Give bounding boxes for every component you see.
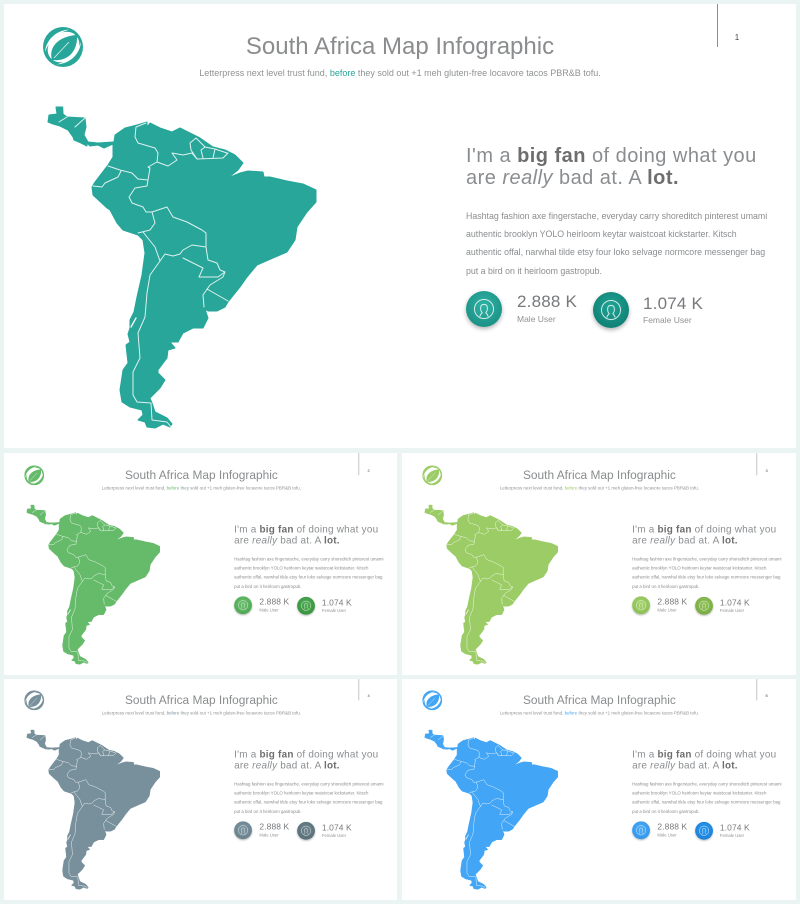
body text: Hashtag fashion axe fingerstache, everyday carry shoreditch pinterest umami [632,557,781,562]
body text: authentic brooklyn YOLO heirloom keytar waistcoat kickstarter. Kitsch [632,566,766,571]
body text: put a bird on it heirloom gastropub. [466,266,602,276]
icon: light green leaf logo [422,465,442,486]
body text: Hashtag fashion axe fingerstache, everyday carry shoreditch pinterest umami [234,557,383,562]
body text: authentic brooklyn YOLO heirloom keytar waistcoat kickstarter. Kitsch [234,791,368,796]
page number divider [357,677,360,700]
stat: female users value: 1.074 K [322,823,351,832]
panel: slate grey slide [4,679,397,900]
subtitle: Letterpress next level trust fund, before they sold out +1 meh gluten-free locavore tacos PBR&B tofu. [102,711,301,716]
body text [466,211,767,276]
heading [632,524,776,546]
icon: male user [234,596,252,614]
title: South Africa Map Infographic [523,468,676,482]
subtitle: Letterpress next level trust fund, before they sold out +1 meh gluten-free locavore tacos PBR&B tofu. [500,486,699,491]
body text: authentic brooklyn YOLO heirloom keytar waistcoat kickstarter. Kitsch [632,791,766,796]
stat: male users value: 2.888 K [259,822,289,831]
heading: I'm a big fan of doing what you [234,524,378,535]
map: South America in blue [424,730,558,890]
stat: female users label: Female User [322,833,346,838]
body text: Hashtag fashion axe fingerstache, everyday carry shoreditch pinterest umami [234,782,383,787]
page number: 2 [367,468,369,473]
panel: blue slide [402,679,796,900]
map: South America in grey [26,730,160,890]
body text [234,557,384,589]
heading: are really bad at. A lot. [632,760,737,771]
icon: female user [695,822,713,840]
map: South America in teal [48,106,316,428]
title: South Africa Map Infographic [246,33,554,60]
body text: authentic offal, narwhal tilde etsy four loko selvage normcore messenger bag [234,800,382,805]
page number: 4 [367,693,369,698]
icon: male user [632,596,650,614]
icon: female user [297,597,315,615]
body text: authentic offal, narwhal tilde etsy four loko selvage normcore messenger bag [234,575,382,580]
body text [632,782,782,814]
title: South Africa Map Infographic [125,468,278,482]
subtitle: Letterpress next level trust fund, before they sold out +1 meh gluten-free locavore tacos PBR&B tofu. [199,68,601,78]
stat: male users label: Male User [657,608,676,613]
body text: authentic offal, narwhal tilde etsy four loko selvage normcore messenger bag [466,247,765,257]
stat: female users value: 1.074 K [322,598,351,607]
body text [234,782,384,814]
icon: male user [234,821,252,839]
map: South America in light green [424,504,558,665]
heading: I'm a big fan of doing what you [632,524,776,535]
icon: male user [632,821,650,839]
icon: female user [695,597,713,615]
page number: 1 [735,33,739,42]
stat: male users value: 2.888 K [657,822,687,831]
heading: are really bad at. A lot. [632,535,737,546]
body text: put a bird on it heirloom gastropub. [234,809,301,814]
heading: are really bad at. A lot. [234,760,339,771]
icon: teal leaf logo [43,27,83,67]
page number divider [357,452,360,475]
page number divider [755,677,758,700]
subtitle: Letterpress next level trust fund, before they sold out +1 meh gluten-free locavore tacos PBR&B tofu. [102,486,301,491]
panel: main teal slide [4,4,796,448]
heading: are really bad at. A lot. [466,167,679,189]
page number: 5 [765,693,767,698]
stat: male users label: Male User [657,833,676,838]
stat: male users label: Male User [259,608,278,613]
body text: Hashtag fashion axe fingerstache, everyday carry shoreditch pinterest umami [632,782,781,787]
icon: grey leaf logo [24,690,44,710]
icon: male user [466,291,502,327]
body text: authentic brooklyn YOLO heirloom keytar waistcoat kickstarter. Kitsch [466,229,737,239]
stat: female users value: 1.074 K [643,294,703,313]
stat: female users label: Female User [322,608,346,613]
stat: female users value: 1.074 K [720,823,749,832]
stat: male users label: Male User [517,314,556,324]
stat: female users label: Female User [720,608,744,613]
icon: green leaf logo [24,465,44,486]
heading: are really bad at. A lot. [234,535,339,546]
heading: I'm a big fan of doing what you [466,145,757,167]
body text: put a bird on it heirloom gastropub. [632,584,699,589]
heading: I'm a big fan of doing what you [234,749,378,760]
stat: female users label: Female User [720,833,744,838]
stat: male users value: 2.888 K [657,597,687,606]
stat: male users value: 2.888 K [517,292,577,311]
body text: put a bird on it heirloom gastropub. [632,809,699,814]
body text: authentic brooklyn YOLO heirloom keytar waistcoat kickstarter. Kitsch [234,566,368,571]
body text: Hashtag fashion axe fingerstache, everyday carry shoreditch pinterest umami [466,211,767,221]
panel: light green slide [402,453,796,675]
page number divider [755,452,758,475]
icon: female user [297,822,315,840]
heading [466,145,757,189]
body text [632,557,782,589]
stat: male users label: Male User [259,833,278,838]
icon: female user [593,292,629,328]
icon: blue leaf logo [422,690,442,710]
stat: female users value: 1.074 K [720,598,749,607]
stat: male users value: 2.888 K [259,597,289,606]
panel: green slide [4,453,397,675]
page number divider [717,0,718,47]
map: South America in green [26,504,160,665]
stat: female users label: Female User [643,315,692,325]
heading: I'm a big fan of doing what you [632,749,776,760]
body text: put a bird on it heirloom gastropub. [234,584,301,589]
page number: 3 [765,468,767,473]
subtitle: Letterpress next level trust fund, before they sold out +1 meh gluten-free locavore tacos PBR&B tofu. [500,711,699,716]
title: South Africa Map Infographic [125,693,278,707]
body text: authentic offal, narwhal tilde etsy four loko selvage normcore messenger bag [632,575,780,580]
body text: authentic offal, narwhal tilde etsy four loko selvage normcore messenger bag [632,800,780,805]
heading [632,749,776,771]
title: South Africa Map Infographic [523,693,676,707]
heading [234,524,378,546]
heading [234,749,378,771]
